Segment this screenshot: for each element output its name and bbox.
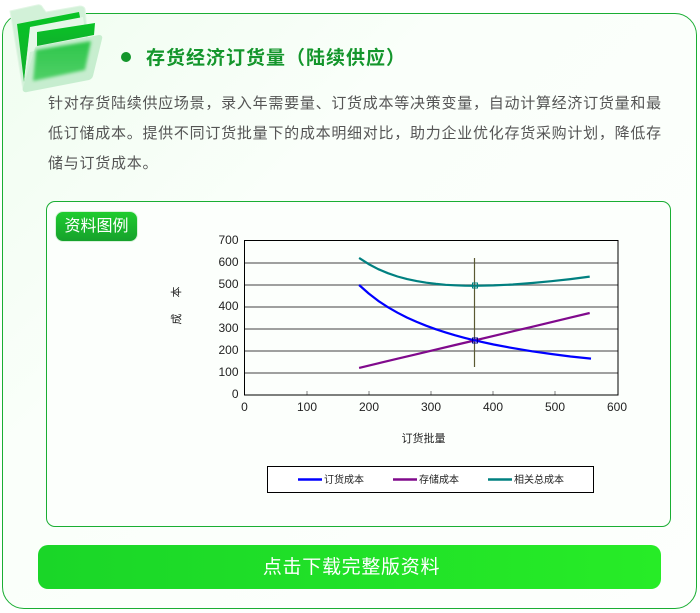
x axis labels: 100 — [297, 400, 317, 414]
x axis labels: 300 — [421, 400, 441, 414]
description text — [48, 95, 662, 172]
description text: 储与订货成本。 — [48, 155, 158, 172]
icon: folder — [10, 4, 102, 92]
download button — [38, 545, 661, 589]
curve: ordering cost — [359, 285, 591, 359]
y axis labels: 300 — [218, 321, 239, 335]
panel: materials preview — [46, 201, 671, 527]
tag: 资料图例 — [55, 211, 138, 242]
bullet dot — [121, 52, 131, 62]
y axis title: 成 — [170, 314, 183, 324]
x axis labels — [241, 400, 627, 414]
y axis labels: 400 — [218, 299, 239, 313]
x axis labels: 0 — [241, 400, 248, 414]
reference line at EOQ — [474, 258, 476, 367]
description text: 针对存货陆续供应场景，录入年需要量、订货成本等决策变量，自动计算经济订货量和最 — [48, 95, 662, 112]
legend: 相关总成本 — [514, 473, 564, 486]
x axis title: 订货批量 — [402, 431, 446, 445]
y axis labels: 0 — [232, 387, 239, 401]
description text: 低订储成本。提供不同订货批量下的成本明细对比，助力企业优化存货采购计划，降低存 — [48, 125, 662, 142]
y axis labels: 200 — [218, 343, 239, 357]
download button: 点击下载完整版资料 — [263, 557, 440, 578]
y axis title: 本 — [169, 286, 183, 298]
y axis labels — [218, 233, 239, 401]
x axis labels: 400 — [483, 400, 503, 414]
title text: 存货经济订货量（陆续供应） — [146, 48, 406, 69]
legend: 订货成本 — [324, 473, 364, 486]
y axis labels: 100 — [218, 365, 239, 379]
y axis labels: 500 — [218, 277, 239, 291]
x axis labels: 500 — [545, 400, 565, 414]
y axis labels: 700 — [218, 233, 239, 247]
x axis labels: 200 — [359, 400, 379, 414]
y axis title — [169, 286, 183, 324]
y axis labels: 600 — [218, 255, 239, 269]
legend — [268, 466, 594, 492]
x axis labels: 600 — [607, 400, 627, 414]
curve: holding cost — [359, 313, 590, 368]
title — [121, 48, 406, 69]
legend: 存储成本 — [419, 473, 459, 486]
curve: total cost — [359, 258, 590, 288]
tag: 资料图例: 资料图例 — [64, 218, 128, 235]
gridlines and plot frame — [244, 240, 618, 395]
